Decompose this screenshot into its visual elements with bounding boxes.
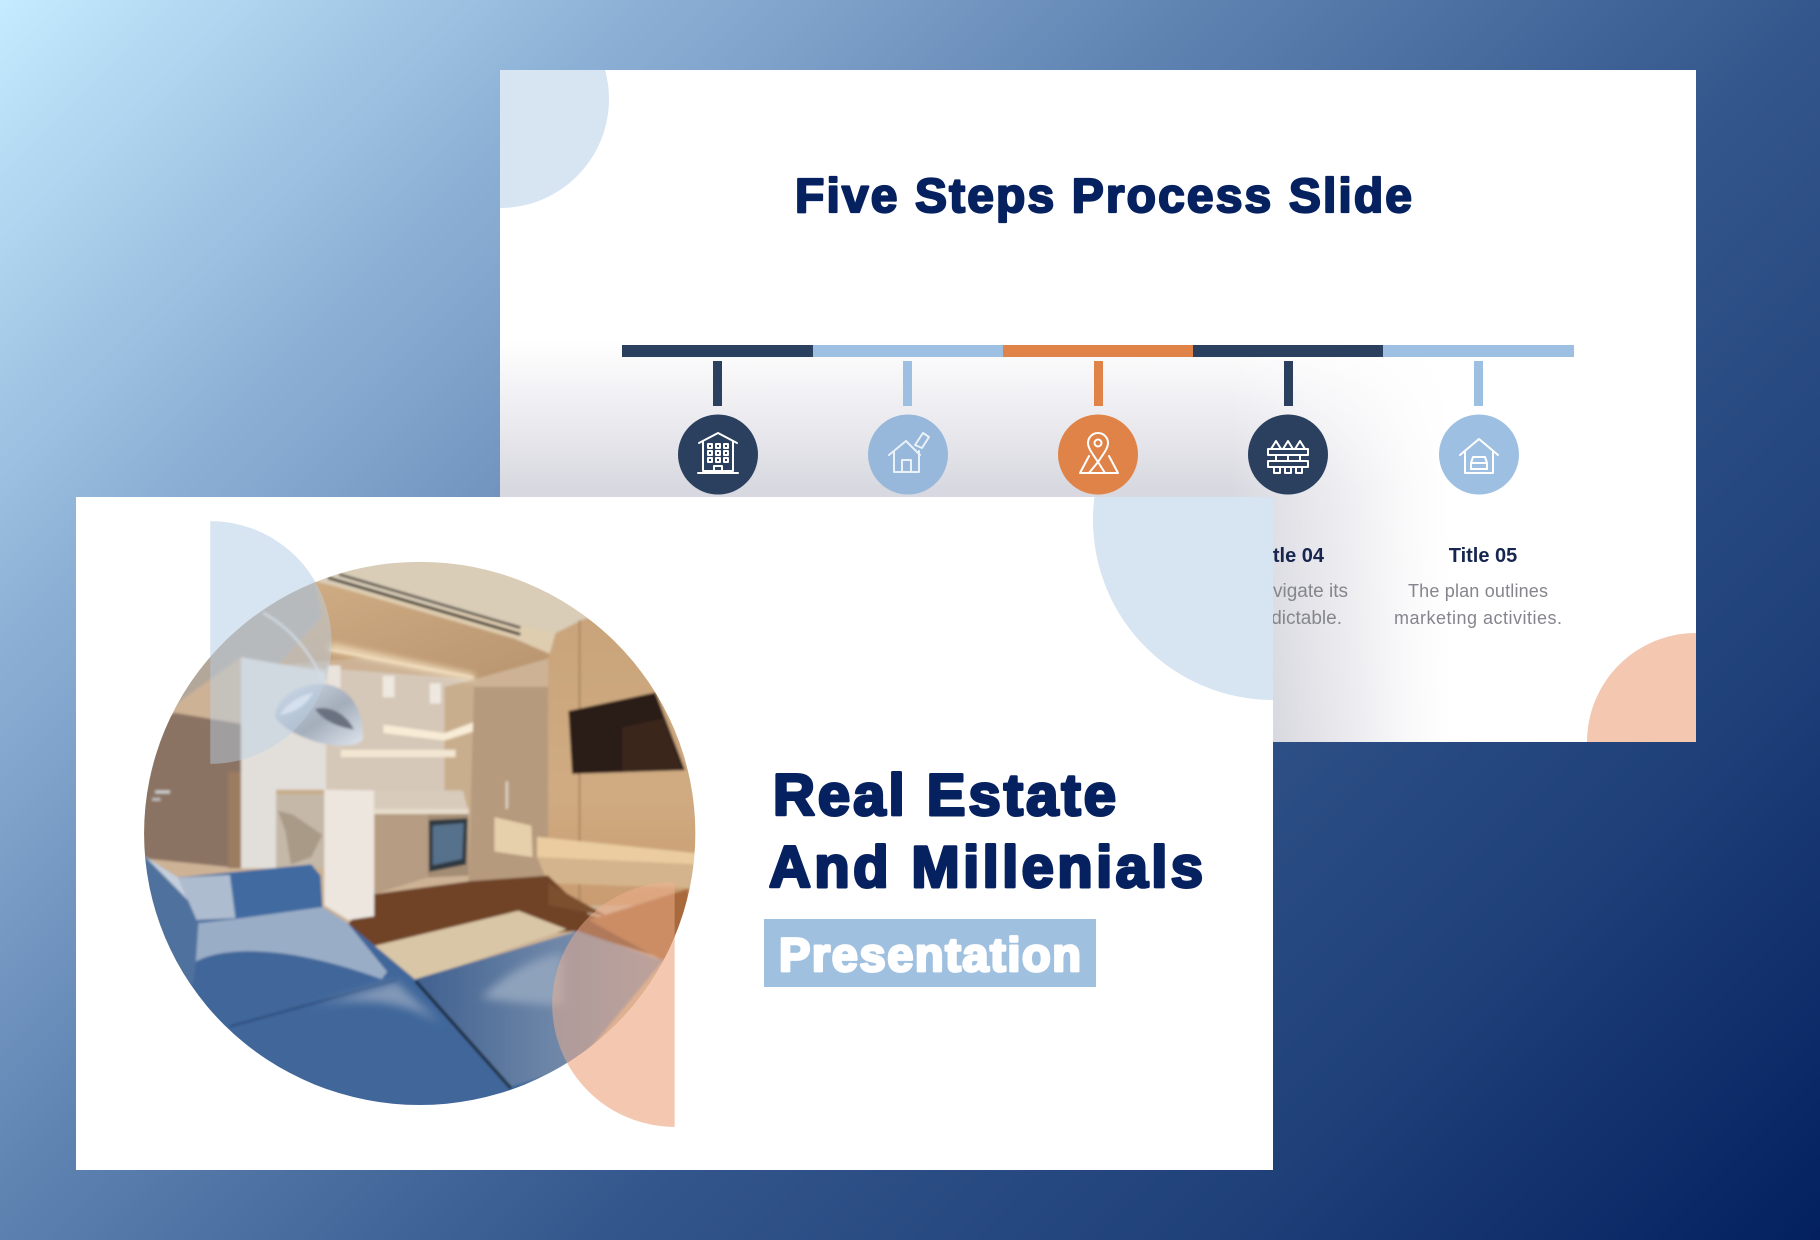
- step 2: house with tag icon: [868, 361, 948, 494]
- step 5: garage car icon: [1439, 361, 1519, 494]
- panel: five steps process slide: [500, 70, 1696, 742]
- step 5 label: [1394, 545, 1562, 628]
- interior photo illustration: [144, 521, 696, 1127]
- decorative circle: light blue top right: [1093, 497, 1273, 700]
- timeline bar: [622, 345, 1574, 357]
- photo scene: [144, 562, 696, 1105]
- subtitle tag: Presentation: [779, 928, 1081, 981]
- decorative corner circle: peach: [1587, 633, 1696, 742]
- step 5 label: The plan outlines: [1408, 581, 1548, 601]
- step 4 label: predictable.: [1244, 608, 1342, 629]
- step 5 label: Title 05: [1449, 545, 1517, 567]
- step 4 label: Title 04: [1255, 545, 1325, 567]
- step 4 label: [1273, 547, 1348, 624]
- slide heading: Five Steps Process Slide: [795, 170, 1412, 223]
- step 5 label: marketing activities.: [1394, 608, 1562, 628]
- step 4: fence icon: [1248, 361, 1328, 494]
- slide title: [768, 771, 1202, 889]
- decorative corner circle: light blue: [500, 70, 609, 208]
- step 3: map pin icon: [1058, 361, 1138, 494]
- panel: real estate title slide: [76, 497, 1273, 1170]
- half circle backing: peach: [567, 936, 675, 1127]
- step 1: building icon: [678, 361, 758, 494]
- slide title: Real Estate: [773, 763, 1116, 828]
- step 4 label: Navigate its: [1249, 581, 1348, 602]
- slide title: And Millenials: [769, 835, 1203, 900]
- half circle backing: light blue: [210, 521, 316, 657]
